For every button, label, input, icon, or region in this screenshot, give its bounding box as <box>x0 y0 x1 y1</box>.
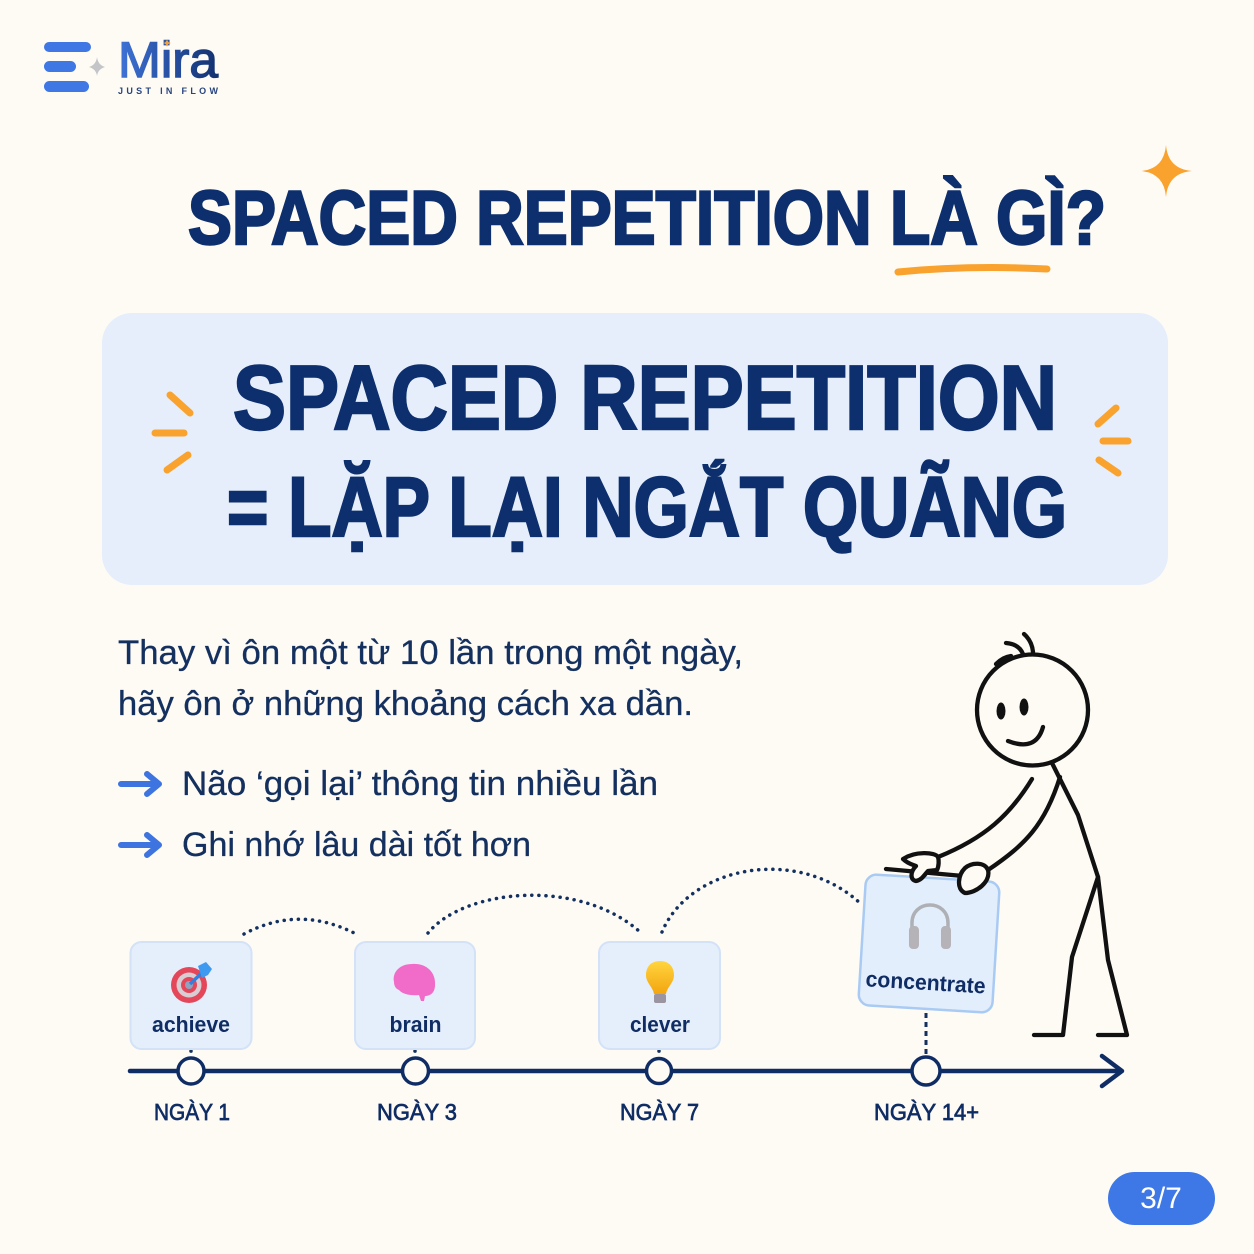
logo: Mira <box>44 32 218 96</box>
icon: logo bars <box>44 42 91 92</box>
arrow head <box>1102 1056 1122 1086</box>
icon: arrow <box>121 774 159 794</box>
day labels: NGÀY 1 <box>154 1099 230 1125</box>
icon: left rays <box>155 395 190 470</box>
logo wordmark: Mira <box>118 32 218 88</box>
day labels: NGÀY 7 <box>620 1099 699 1125</box>
icon: brain <box>394 964 435 1001</box>
bullet 2: Ghi nhớ lâu dài tốt hơn <box>182 826 531 864</box>
smile <box>1008 727 1043 744</box>
card: brain: brain <box>390 1012 442 1037</box>
timeline axis <box>130 1056 1122 1086</box>
title: SPACED REPETITION LÀ GÌ? <box>188 176 1106 261</box>
intro text: Thay vì ôn một từ 10 lần trong một ngày, <box>118 634 743 672</box>
card: brain <box>355 942 475 1049</box>
icon: logo sparkle <box>89 57 105 76</box>
icon: logo star <box>163 39 171 47</box>
icon: right rays <box>1098 408 1128 473</box>
dashed connector <box>924 1013 928 1056</box>
card: achieve: achieve <box>152 1012 230 1037</box>
right hand <box>959 864 988 893</box>
title underline <box>898 268 1047 272</box>
card: clever <box>599 942 720 1049</box>
card: concentrate: concentrate <box>865 966 986 999</box>
icon: arrow <box>121 835 159 855</box>
eyes <box>996 698 1028 720</box>
head <box>977 654 1088 766</box>
legs <box>1034 877 1127 1035</box>
hair <box>996 634 1033 664</box>
definition line 2: = LẶP LẠI NGẮT QUÃNG <box>227 460 1067 554</box>
left hand <box>903 853 939 881</box>
intro text: hãy ôn ở những khoảng cách xa dần. <box>118 685 693 723</box>
arm 1 <box>938 779 1032 857</box>
day labels <box>154 1099 979 1125</box>
icon: headphones <box>909 905 951 949</box>
definition line 1: SPACED REPETITION <box>233 348 1057 449</box>
day labels: NGÀY 14+ <box>874 1099 979 1125</box>
icon: target <box>171 962 212 1003</box>
panel: definition <box>102 313 1168 585</box>
arm 2 <box>988 777 1060 870</box>
bullet 1: Não ‘gọi lại’ thông tin nhiều lần <box>182 765 658 803</box>
icon: orange sparkle <box>1141 145 1192 197</box>
card: achieve <box>130 942 252 1049</box>
logo tagline: JUST IN FLOW <box>118 86 218 96</box>
dotted arcs <box>191 869 862 1056</box>
card: clever: clever <box>630 1012 690 1037</box>
card top line <box>886 869 963 876</box>
timeline nodes <box>178 1057 940 1085</box>
icon: light bulb <box>646 961 674 1003</box>
torso <box>1052 763 1098 877</box>
card: concentrate <box>858 874 1000 1013</box>
day labels: NGÀY 3 <box>377 1099 457 1125</box>
stick figure <box>886 634 1127 1035</box>
page badge <box>1108 1172 1215 1225</box>
page badge: 3/7 <box>1140 1182 1182 1215</box>
intro text <box>118 634 743 723</box>
